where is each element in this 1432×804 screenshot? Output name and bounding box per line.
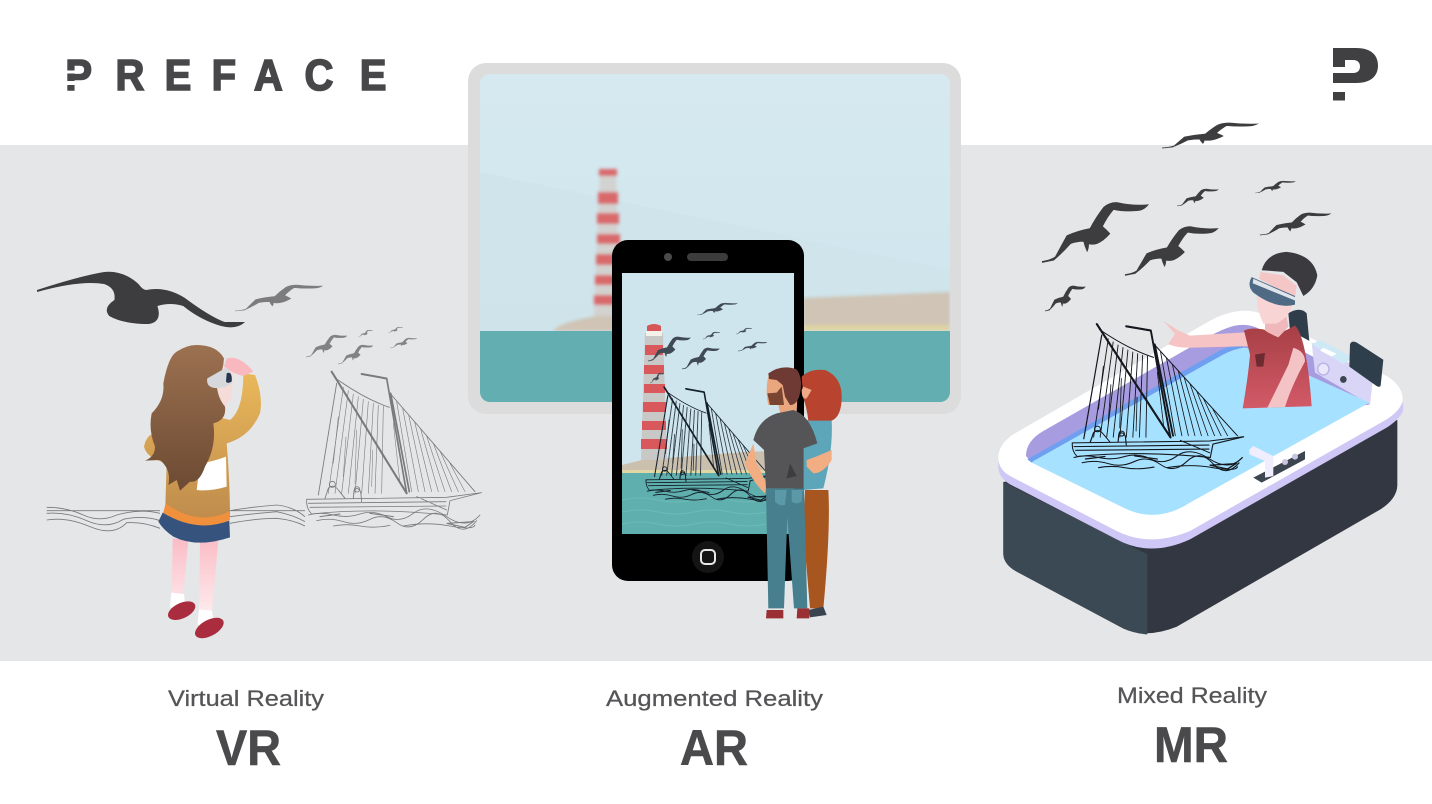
tub controls xyxy=(1312,340,1353,383)
tablet screen xyxy=(480,74,950,402)
label: Mixed Reality: Mixed Reality xyxy=(1117,683,1267,708)
label: Virtual Reality: Virtual Reality xyxy=(168,686,324,711)
flock of small birds xyxy=(306,327,417,364)
faucet xyxy=(1249,446,1305,483)
socks xyxy=(170,593,213,627)
tub lilac rim xyxy=(998,316,1403,548)
logo mark: P xyxy=(1333,48,1378,100)
water xyxy=(1032,348,1369,515)
headset xyxy=(207,367,232,388)
large bird xyxy=(37,272,245,327)
lighthouse xyxy=(641,324,667,460)
side panel xyxy=(1349,342,1383,387)
hair xyxy=(145,345,225,491)
legs xyxy=(172,538,218,612)
face and hand xyxy=(217,367,233,410)
MR scene xyxy=(998,123,1403,634)
boat projected in tub xyxy=(1072,324,1244,471)
person with headset xyxy=(1163,252,1317,408)
boat on phone xyxy=(646,387,773,502)
birds on phone xyxy=(648,303,767,383)
tablet xyxy=(468,63,961,414)
phone screen xyxy=(622,273,794,534)
heading: MR: MR xyxy=(1154,717,1228,773)
heading: VR: VR xyxy=(216,720,281,776)
gray background band xyxy=(0,145,1432,661)
tub fixtures and person xyxy=(1163,252,1383,408)
tub outer walls xyxy=(1003,420,1397,634)
man xyxy=(745,367,832,618)
girl with VR headset xyxy=(144,345,261,642)
heading: AR: AR xyxy=(680,720,748,776)
sweater xyxy=(144,373,261,525)
tablet frame xyxy=(468,63,961,414)
VR scene xyxy=(37,272,482,642)
boat sketch with waves xyxy=(47,372,482,531)
tub rim and water xyxy=(998,311,1403,548)
flock of dark birds xyxy=(1042,123,1330,311)
back wall lilac xyxy=(1026,325,1370,463)
hot tub xyxy=(998,252,1403,634)
couple xyxy=(745,367,842,618)
tub white rim xyxy=(998,311,1403,539)
gray bird xyxy=(235,285,322,311)
phone xyxy=(612,240,804,581)
camera and speaker xyxy=(664,253,728,261)
logo wordmark: PREFACE: PREFACE xyxy=(65,50,386,99)
skirt xyxy=(158,513,230,543)
home button xyxy=(692,541,724,573)
shoes xyxy=(165,598,227,642)
blurred lighthouse xyxy=(594,169,620,316)
label: Augmented Reality: Augmented Reality xyxy=(606,686,823,711)
phone body xyxy=(612,240,804,581)
woman xyxy=(802,370,842,617)
